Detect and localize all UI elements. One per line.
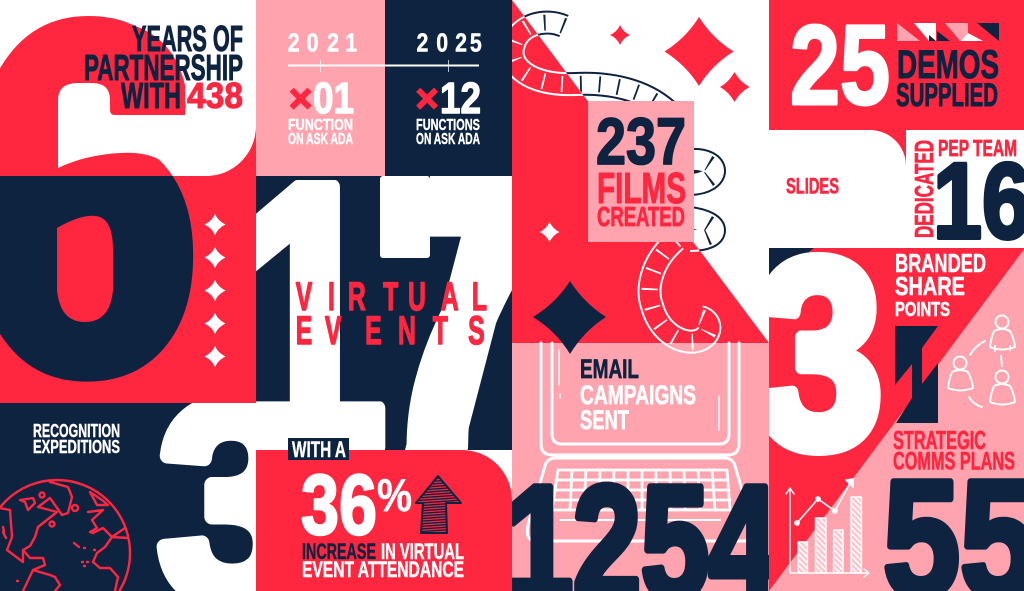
heading: years of partnership <box>84 18 243 116</box>
text: dedicated: DEDICATED <box>909 140 939 238</box>
text: increase in virtual event attendance: INCREASE <box>302 539 376 564</box>
panel: virtual events <box>256 176 512 450</box>
stat: 2021 one function: 2021 <box>288 29 357 58</box>
panel: 2025 <box>385 0 512 176</box>
icon: white diamonds column <box>204 214 226 367</box>
icon: globe <box>0 480 130 591</box>
icon: clapperboard stripes <box>897 23 999 41</box>
icon: red diamonds <box>610 17 750 102</box>
text: strategic comms plans <box>893 425 1015 476</box>
text: increase in virtual event attendance: IN VIRTUAL <box>381 539 464 564</box>
text: email campaigns sent: CAMPAIGNS <box>580 380 696 410</box>
text: branded share points: POINTS <box>895 299 950 321</box>
stat: 237 films created: FILMS <box>597 164 686 213</box>
panel: 25 demos <box>769 0 1024 170</box>
text: recognition expeditions: EXPEDITIONS <box>33 437 120 457</box>
icon: film strip <box>512 23 714 342</box>
big number 3: 3 <box>755 203 883 503</box>
label: with a: WITH A <box>292 437 346 462</box>
chart: bars and rising line <box>786 479 869 577</box>
stat: 2021 one function: 01 <box>313 74 354 123</box>
heading: years of partnership: YEARS OF <box>132 18 243 59</box>
stat: 2021 one function: ON ASK ADA <box>288 131 353 148</box>
heading: virtual events <box>296 275 487 354</box>
timeline <box>288 60 479 72</box>
stat: 25 demos supplied <box>790 2 999 128</box>
panel: recognition expeditions <box>0 403 256 591</box>
stat: 237 films created <box>596 104 686 232</box>
stat: 2021 one function <box>288 29 357 148</box>
text: recognition expeditions <box>33 421 120 457</box>
text: email campaigns sent: SENT <box>580 405 629 435</box>
panel: films triangle <box>512 0 769 343</box>
stat: 25 demos supplied: 25 <box>790 2 890 128</box>
heading: years of partnership: PARTNERSHIP <box>84 47 243 88</box>
stat: 36 percent: 36 <box>301 458 377 553</box>
stat: 2025 twelve functions: 12 <box>440 74 481 123</box>
icon: scribbled up arrow <box>416 476 461 533</box>
stat: 2021 one function: FUNCTION <box>288 117 353 134</box>
stat: 2025 twelve functions: 2025 <box>417 29 482 58</box>
panel: six years background <box>0 0 257 403</box>
panel: 237 films created <box>588 101 694 242</box>
big number 17: 1 <box>228 106 388 528</box>
text: branded share points: BRANDED <box>895 248 986 278</box>
text: branded share points: SHARE <box>895 271 965 301</box>
heading: years of partnership: 438 <box>187 75 243 116</box>
heading: years of partnership: WITH <box>121 75 181 116</box>
text: recognition expeditions: RECOGNITION <box>33 421 120 441</box>
panel: 2021 <box>256 0 385 176</box>
stat: 36 percent: % <box>377 469 412 521</box>
heading: virtual events: VIRTUAL <box>296 275 487 320</box>
heading: virtual events: EVENTS <box>296 309 485 354</box>
text: email campaigns sent: EMAIL <box>580 354 639 384</box>
text: increase in virtual event attendance: EVENT ATTENDANCE <box>302 557 464 582</box>
text: email campaigns sent <box>580 354 696 435</box>
stat: 2025 twelve functions: × <box>415 77 439 121</box>
panel: slides and team <box>769 130 1024 248</box>
stat: 237 films created: CREATED <box>597 201 685 232</box>
stat: 2025 twelve functions: ON ASK ADA <box>416 131 480 148</box>
stat: 237 films created: 237 <box>596 104 686 178</box>
big number 17: 7 <box>364 106 554 528</box>
icon: laptop <box>527 343 753 541</box>
text: slides: SLIDES <box>786 174 839 198</box>
stat: 2025 twelve functions <box>415 29 482 148</box>
stat: 2025 twelve functions: FUNCTIONS <box>416 117 480 134</box>
icon: white diamond <box>540 222 560 242</box>
text: increase in virtual event attendance <box>302 539 464 582</box>
navy fragment shape <box>895 326 938 423</box>
icon: navy diamond <box>533 281 606 354</box>
panel: share points and plans <box>769 248 1024 591</box>
stat: 2021 one function: × <box>289 77 312 121</box>
big number 17 <box>256 176 512 450</box>
text: branded share points <box>895 248 986 321</box>
panel: 36 percent increase <box>256 450 512 591</box>
icon: connected people <box>948 316 1015 407</box>
panel: email campaigns <box>512 343 769 591</box>
